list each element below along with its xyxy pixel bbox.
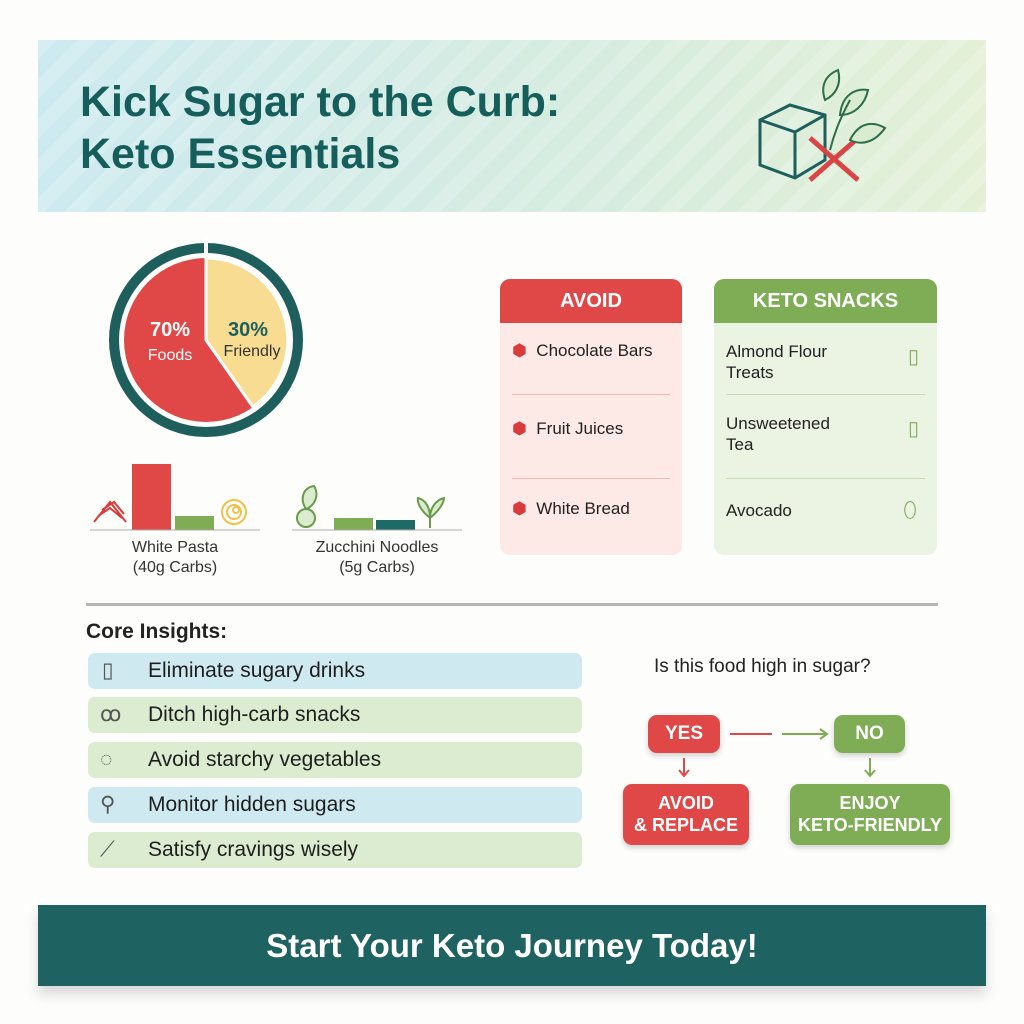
- title: Kick Sugar to the Curb:: [80, 78, 560, 126]
- snack: almond flour treats: [726, 342, 919, 382]
- snack: avocado: Avocado: [726, 501, 792, 520]
- insight 1: ▯: [102, 659, 114, 682]
- snack: unsweetened tea: [726, 414, 919, 454]
- avoid item: chocolate bars: ⬢ Chocolate Bars: [512, 341, 653, 360]
- pie chart: Friendly: [224, 343, 280, 360]
- insight 5: [88, 832, 582, 868]
- insight 1: [88, 653, 582, 689]
- bar chart: white pasta: White Pasta: [132, 539, 218, 556]
- insight 2: ꝏ: [100, 703, 121, 726]
- title: [80, 78, 560, 178]
- avoid item: white bread: ⬢ White Bread: [512, 499, 630, 518]
- enjoy keto-friendly box: [790, 784, 950, 845]
- title: Keto Essentials: [80, 130, 400, 178]
- pie chart: 30%: [228, 319, 268, 341]
- heading: core insights: Core Insights:: [86, 620, 227, 643]
- avoid & replace box: [623, 784, 749, 845]
- insights list: [88, 653, 582, 868]
- bar chart: zucchini noodles: Zucchini Noodles: [316, 539, 438, 556]
- bar chart: white pasta: (40g Carbs): [133, 559, 217, 576]
- avoid header: [500, 279, 682, 323]
- keto snacks header: [714, 279, 937, 323]
- insight 3: Avoid starchy vegetables: [148, 748, 381, 771]
- snack: almond flour treats: ▯: [908, 346, 919, 368]
- arrows: [678, 728, 876, 778]
- insight 3: [88, 742, 582, 778]
- yes button: [648, 715, 720, 753]
- icon: sugar cube with cross and leaves: [758, 68, 886, 182]
- panel: keto snacks: [714, 279, 937, 555]
- insight 4: ⚲: [100, 793, 115, 816]
- snack: almond flour treats: Almond Flour: [726, 342, 827, 361]
- bar chart: white pasta: [90, 464, 260, 576]
- panel: avoid: [500, 279, 682, 555]
- snack: unsweetened tea: Tea: [726, 435, 753, 454]
- flowchart question: Is this food high in sugar?: [654, 656, 871, 677]
- snack: avocado: ⬯: [903, 497, 917, 522]
- keto snacks header: KETO SNACKS: [753, 290, 898, 312]
- no button: NO: [855, 723, 884, 744]
- insight 4: Monitor hidden sugars: [148, 793, 356, 816]
- insight 5: Satisfy cravings wisely: [148, 838, 358, 861]
- insight 5: ⟋: [100, 838, 115, 861]
- pie chart: [109, 243, 303, 437]
- avoid & replace box: & REPLACE: [634, 815, 738, 835]
- insight 4: [88, 787, 582, 823]
- footer banner: [38, 905, 986, 986]
- enjoy keto-friendly box: ENJOY: [839, 793, 901, 813]
- pie chart: Foods: [148, 347, 192, 364]
- insight 3: ◌: [100, 748, 112, 771]
- snack: avocado: [726, 497, 917, 522]
- header banner: [38, 40, 986, 212]
- insight 1: Eliminate sugary drinks: [148, 659, 365, 682]
- no button: [834, 715, 905, 753]
- avoid item: fruit juices: ⬢ Fruit Juices: [512, 419, 623, 438]
- flowchart: [620, 715, 952, 850]
- snack: unsweetened tea: Unsweetened: [726, 414, 830, 433]
- bar chart: zucchini noodles: [292, 484, 462, 576]
- pie chart: 70%: [150, 319, 190, 341]
- insight 2: Ditch high-carb snacks: [148, 703, 360, 726]
- snack: almond flour treats: Treats: [726, 363, 774, 382]
- bar chart: zucchini noodles: (5g Carbs): [339, 559, 415, 576]
- footer banner: Start Your Keto Journey Today!: [266, 927, 758, 964]
- avoid header: AVOID: [560, 290, 622, 312]
- enjoy keto-friendly box: KETO-FRIENDLY: [798, 815, 942, 835]
- yes button: YES: [665, 723, 703, 744]
- avoid & replace box: AVOID: [658, 793, 714, 813]
- snack: unsweetened tea: ▯: [908, 418, 919, 440]
- insight 2: [88, 697, 582, 733]
